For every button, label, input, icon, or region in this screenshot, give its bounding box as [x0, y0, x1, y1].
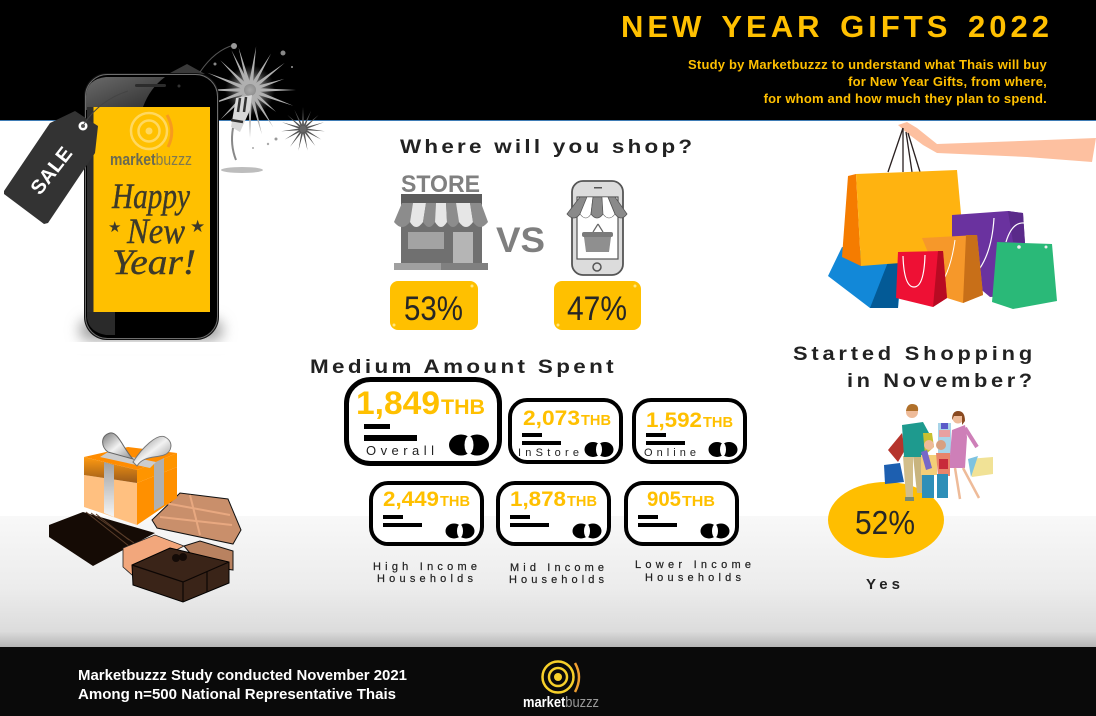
label: mid income households: Households	[509, 574, 604, 586]
card: lower income: 905	[647, 488, 681, 511]
card: overall	[346, 380, 500, 464]
icon: family with shopping bags	[884, 404, 993, 501]
label: mid income households	[509, 562, 604, 586]
text: VS: VS	[496, 221, 545, 260]
heading: started shopping in november: in November?	[847, 370, 1032, 392]
label: high income households	[373, 561, 477, 585]
footer band	[0, 647, 1096, 716]
greeting text: Happy New Year: New	[126, 211, 185, 251]
card: overall: Overall	[366, 443, 434, 458]
card: overall: THB	[441, 396, 485, 419]
heading: started shopping in november: Started Shopping	[793, 343, 1032, 365]
icon: gift boxes	[49, 433, 241, 602]
subtitle text block: Study by Marketbuzzz to understand what Thais will buy	[688, 57, 1048, 72]
icon: store: STORE	[401, 171, 480, 198]
card: in store: 2,073	[523, 407, 580, 430]
card: high income	[371, 483, 482, 544]
label: lower income households	[635, 559, 751, 584]
header band	[0, 0, 1096, 121]
card: online: Online	[644, 447, 696, 459]
card: in store: THB	[581, 413, 611, 429]
stat: store 53%: 53%	[404, 290, 463, 328]
card: mid income: 1,878	[510, 488, 566, 511]
subtitle text block: for whom and how much they plan to spend.	[764, 91, 1047, 106]
card: high income: 2,449	[383, 488, 439, 511]
icon: store	[394, 171, 488, 270]
screen logo: marketbuzzz	[110, 113, 192, 169]
icon: smartphone with greeting	[60, 73, 250, 354]
label: high income households: High Income	[373, 561, 477, 573]
icon: sale tag	[4, 91, 128, 224]
card: in store: InStore	[518, 447, 579, 459]
label: mid income households: Mid Income	[510, 562, 604, 574]
stat: online 47%: 47%	[567, 290, 627, 328]
card: lower income: THB	[682, 494, 715, 510]
label: lower income households: Households	[645, 572, 742, 584]
heading: medium amount spent: Medium Amount Spent	[310, 356, 614, 378]
title: NEW YEAR GIFTS 2022	[621, 9, 1053, 44]
greeting text: Happy New Year: Year!	[112, 242, 196, 282]
footer logo: marketbuzzz	[523, 662, 599, 711]
card: overall: 1,849	[356, 385, 440, 421]
stat: online 47%	[554, 281, 641, 330]
footer text: Marketbuzzz Study conducted November 2021	[78, 668, 407, 684]
icon: fireworks	[170, 43, 325, 173]
heading: started shopping in november	[793, 343, 1032, 392]
card: in store	[510, 400, 621, 462]
card: lower income	[626, 483, 737, 544]
subtitle text block: for New Year Gifts, from where,	[848, 74, 1047, 89]
card: high income: THB	[440, 494, 470, 510]
card: online: 1,592	[646, 409, 702, 432]
subtitle text block	[688, 57, 1048, 106]
icon: mobile shop	[567, 181, 627, 275]
label: lower income households: Lower Income	[635, 559, 751, 571]
phone screen	[94, 107, 210, 312]
card: online	[634, 400, 745, 462]
label: yes: Yes	[866, 576, 900, 593]
greeting text: Happy New Year	[108, 176, 205, 282]
heading: where will you shop: Where will you shop?	[400, 136, 692, 158]
greeting text: Happy New Year: ★	[190, 217, 205, 236]
icon: sale tag: SALE	[27, 143, 77, 199]
card: online: THB	[703, 415, 733, 431]
footer logo: marketbuzzz: marketbuzzz	[523, 694, 599, 711]
stat: 52% yes ellipse	[828, 482, 944, 558]
stat: store 53%	[390, 281, 478, 330]
icon: shopping bags held by hand	[828, 122, 1096, 309]
greeting text: Happy New Year: ★	[108, 220, 121, 236]
greeting text: Happy New Year: Happy	[111, 176, 190, 216]
screen logo: marketbuzzz: marketbuzzz	[110, 151, 192, 169]
card: mid income	[498, 483, 609, 544]
card: mid income: THB	[567, 494, 597, 510]
label: high income households: Households	[377, 573, 474, 585]
footer text: Among n=500 National Representative Thais	[78, 687, 396, 703]
stat: 52% yes ellipse: 52%	[855, 504, 915, 541]
footer text	[78, 668, 407, 703]
